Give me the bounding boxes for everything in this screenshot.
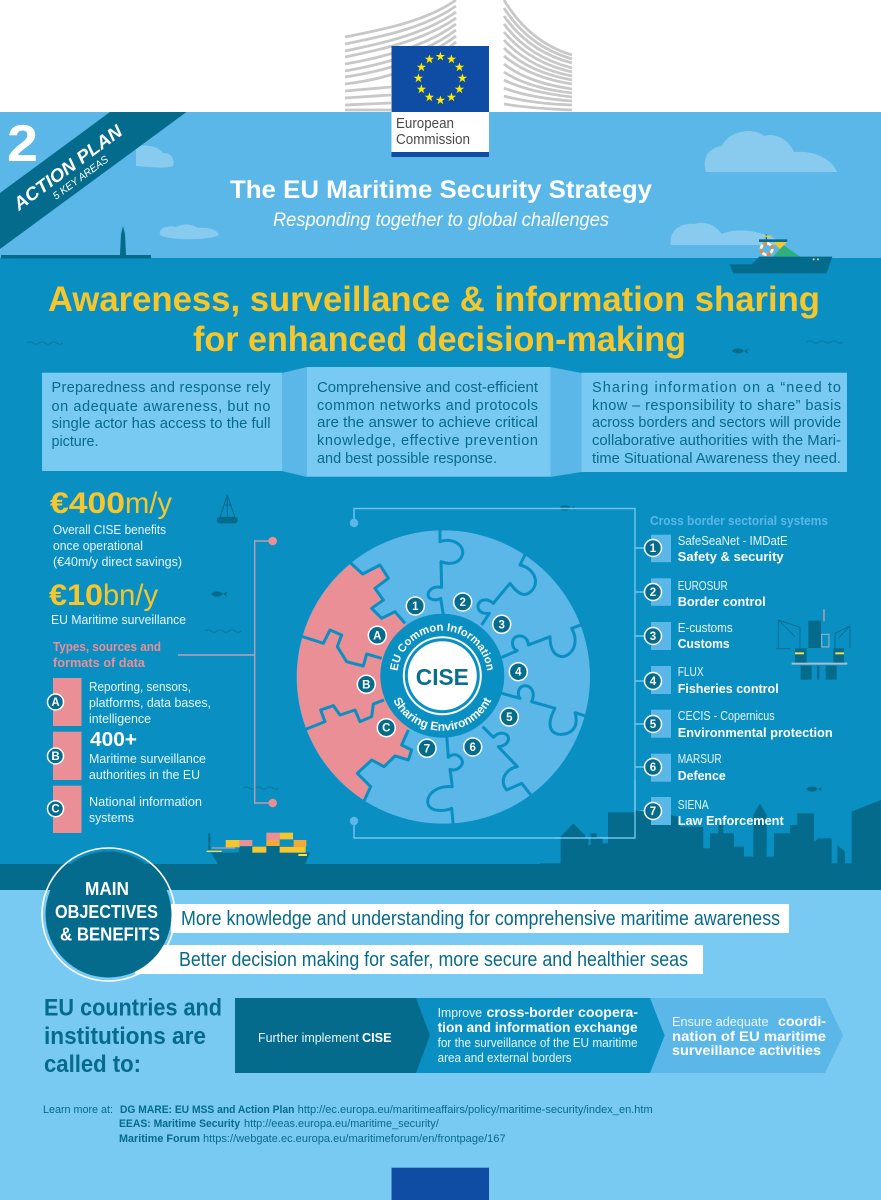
panel: three folded intro boxes: Comprehensive and cost-efficient xyxy=(317,380,538,396)
footer: learn more links: http://ec.europa.eu/maritimeaffairs/policy/maritime-security/index_en.htm xyxy=(298,1104,653,1116)
footer: learn more links: EEAS: Maritime Security xyxy=(119,1118,241,1130)
ribbon: action plan: ACTION PLAN xyxy=(9,120,127,215)
system 4: Fisheries control xyxy=(678,681,779,696)
clouds xyxy=(136,131,837,245)
system 2: EUROSUR xyxy=(678,578,728,593)
system 4: FLUX xyxy=(678,664,704,679)
stat: 400 million per year: (€40m/y direct savings) xyxy=(53,555,182,569)
system 7: SIENA xyxy=(678,797,709,812)
heading: EU countries and institutions xyxy=(44,995,222,1078)
white bar: second objective xyxy=(135,945,703,974)
stat: 400 million per year: m/y xyxy=(125,487,172,520)
panel: three folded intro boxes: know – responsibility to share” basis xyxy=(592,398,841,414)
data type C: National information xyxy=(89,795,202,809)
heading: types, sources and formats of data: formats of data xyxy=(53,656,146,670)
white bar: first objective: More knowledge and understanding for comprehensive maritime awareness xyxy=(181,908,780,930)
wheel number and letter badges: 1 xyxy=(412,601,419,613)
badge: main objectives and benefits: MAIN xyxy=(85,879,129,899)
system 6: 6 xyxy=(650,762,656,774)
system 6: Defence xyxy=(678,768,726,783)
wheel number and letter badges: 3 xyxy=(498,619,505,631)
system 2: Border control xyxy=(678,594,766,609)
stat: 400 million per year xyxy=(50,487,182,569)
arrow step 2 xyxy=(410,998,665,1073)
data type B: authorities in the EU xyxy=(89,768,200,782)
background: sea xyxy=(0,258,881,866)
system 6 xyxy=(644,751,726,783)
badge: main objectives and benefits xyxy=(42,848,175,981)
data type C: systems xyxy=(89,811,134,825)
arrow step 1: CISE xyxy=(362,1030,392,1045)
hub: inner ring: EU Common Information xyxy=(390,623,493,670)
arrow step 3: coordi- xyxy=(778,1013,826,1029)
system 1 xyxy=(644,533,788,564)
background: dark water band xyxy=(0,864,881,890)
data type B: 400+ xyxy=(90,729,137,751)
icon: boat xyxy=(729,234,832,273)
arrow step 3: Ensure adequate xyxy=(672,1014,768,1029)
system 5 xyxy=(644,708,833,740)
footer blue tab xyxy=(392,1168,489,1200)
data type A xyxy=(48,678,211,726)
heading: EU countries and institutions: EU countries and xyxy=(44,995,222,1022)
panel: three folded intro boxes: common networks and protocols xyxy=(317,398,538,414)
panel: three folded intro boxes: Preparedness and response rely xyxy=(52,380,271,396)
heading xyxy=(48,280,820,359)
background: light lower panel xyxy=(0,890,881,1200)
system 4 xyxy=(644,664,779,696)
system 3: Customs xyxy=(678,636,730,651)
arrow step 3: nation of EU maritime xyxy=(672,1028,826,1044)
system 1: SafeSeaNet - IMDatE xyxy=(678,533,788,548)
heading: for enhanced decision-making xyxy=(193,320,686,359)
connector: pink bracket xyxy=(178,537,277,807)
stat: 400 million per year: €400 xyxy=(50,487,125,520)
system 1: 1 xyxy=(650,543,657,555)
icon: lighthouse on jetty xyxy=(1,226,151,258)
hub: inner ring: CISE xyxy=(416,664,469,690)
panel: three folded intro boxes: picture. xyxy=(52,434,98,450)
white bar: first objective xyxy=(171,904,789,933)
badge: main objectives and benefits: OBJECTIVES xyxy=(55,902,158,922)
icon: container ship xyxy=(207,833,310,865)
wheel number and letter badges: 5 xyxy=(506,712,513,724)
wheel number and letter badges: 4 xyxy=(515,667,522,679)
system 5: Environmental protection xyxy=(678,725,833,740)
panel: three folded intro boxes: knowledge, effective prevention xyxy=(317,433,538,449)
system 6: MARSUR xyxy=(678,751,722,766)
system 3 xyxy=(644,620,733,651)
system 1: Safety & security xyxy=(678,549,784,564)
heading: Awareness, surveillance & information sharing xyxy=(48,280,820,319)
wheel number and letter badges: 2 xyxy=(459,597,466,609)
panel: three folded intro boxes: collaborative authorities with the Mari- xyxy=(592,433,841,449)
system 2 xyxy=(644,578,766,609)
footer: learn more links: Maritime Forum xyxy=(119,1133,200,1145)
wheel number and letter badges xyxy=(357,593,527,757)
connector: blue bracket xyxy=(350,508,651,838)
background: white header xyxy=(0,0,881,112)
system 7 xyxy=(644,797,784,828)
panel: three folded intro boxes xyxy=(42,367,847,477)
data type A: intelligence xyxy=(89,712,151,726)
sea decorations xyxy=(27,341,843,792)
system 7: Law Enforcement xyxy=(678,813,784,828)
chart: CISE puzzle wheel xyxy=(296,530,590,824)
panel: three folded intro boxes: Sharing information on a “need to xyxy=(592,380,841,396)
wheel number and letter badges: 7 xyxy=(424,743,430,755)
data type A: Reporting, sensors, xyxy=(89,680,191,694)
data type C: C xyxy=(51,804,60,816)
illustration: Berlaymont building xyxy=(345,0,572,110)
stat: 400 million per year: Overall CISE benefits xyxy=(53,523,166,537)
hub: inner ring xyxy=(380,614,504,738)
heading: types, sources and formats of data: Types, sources and xyxy=(53,640,161,654)
system 3: E-customs xyxy=(678,620,733,635)
stat: 10 billion per year: €10 xyxy=(49,579,103,612)
arrow step 2: area and external borders xyxy=(438,1050,572,1065)
data type C xyxy=(48,786,202,833)
system 2: 2 xyxy=(650,587,656,599)
stat: 10 billion per year xyxy=(49,579,186,627)
data type A: A xyxy=(51,697,60,709)
data type B: B xyxy=(51,751,60,763)
number 2: 2 xyxy=(7,115,38,173)
logo: European Commission wordmark: European xyxy=(396,115,454,132)
panel: three folded intro boxes: are the answer to achieve critical xyxy=(317,415,538,431)
wheel number and letter badges: B xyxy=(362,679,370,691)
footer: learn more links: https://webgate.ec.europa.eu/maritimeforum/en/frontpage/167 xyxy=(203,1133,506,1145)
panel: three folded intro boxes: on adequate awareness, but no xyxy=(52,399,270,415)
redraw of bracket base over skyline xyxy=(554,780,635,838)
arrow step 1 xyxy=(235,998,430,1073)
wheel number and letter badges: C xyxy=(382,723,390,735)
arrow step 2: for the surveillance of the EU maritime xyxy=(438,1035,638,1050)
arrow step 2: cross-border coopera- xyxy=(486,1004,638,1020)
wheel number and letter badges: 6 xyxy=(469,742,476,754)
logo: European Commission wordmark xyxy=(392,112,489,157)
background: sky band xyxy=(0,112,881,258)
logo: European Commission wordmark: Commission xyxy=(396,131,470,148)
system 4: 4 xyxy=(650,676,657,688)
logo: European Commission flag xyxy=(392,46,489,112)
arrow step 3 xyxy=(640,998,843,1073)
panel: three folded intro boxes: single actor has access to the full xyxy=(52,416,270,432)
stat: 10 billion per year: bn/y xyxy=(103,579,158,612)
icon: oil rig xyxy=(776,609,850,680)
panel: three folded intro boxes: across borders and sectors will provide xyxy=(592,415,841,431)
data type A: platforms, data bases, xyxy=(89,696,211,710)
footer: learn more links: http://eeas.europa.eu/maritime_security/ xyxy=(244,1118,440,1130)
subtitle: Responding together to global challenges xyxy=(273,210,609,231)
heading: EU countries and institutions: called to: xyxy=(44,1051,141,1078)
title: The EU Maritime Security Strategy xyxy=(230,176,652,204)
system 7: 7 xyxy=(650,806,656,818)
illustration: city skyline xyxy=(540,800,881,890)
arrow step 3: surveillance activities xyxy=(672,1042,821,1058)
arrow step 2: Improve xyxy=(438,1005,482,1020)
wheel number and letter badges: A xyxy=(373,630,381,642)
footer: learn more links xyxy=(43,1104,653,1145)
data type B: Maritime surveillance xyxy=(89,752,206,766)
data type B xyxy=(48,729,206,782)
system 5: CECIS - Copernicus xyxy=(678,708,775,723)
panel: three folded intro boxes: time Situational Awareness they need. xyxy=(592,451,841,467)
badge: main objectives and benefits: & BENEFITS xyxy=(60,925,160,945)
heading: types, sources and formats of data xyxy=(53,640,161,670)
footer: learn more links: DG MARE: EU MSS and Action Plan xyxy=(120,1104,295,1116)
hub: inner ring: Sharing Environment xyxy=(394,698,492,731)
arrow step 2: tion and information exchange xyxy=(438,1019,638,1035)
stat: 10 billion per year: EU Maritime surveillance xyxy=(51,613,186,627)
stat: 400 million per year: once operational xyxy=(53,539,143,553)
icon: buoy xyxy=(217,495,237,523)
panel: three folded intro boxes: and best possible response. xyxy=(317,451,497,467)
heading: EU countries and institutions: institutions are xyxy=(44,1023,206,1050)
footer: learn more links: Learn more at: xyxy=(43,1104,113,1116)
system 3: 3 xyxy=(650,631,656,643)
heading: cross border sectorial systems: Cross border sectorial systems xyxy=(650,513,828,528)
ribbon: action plan: 5 KEY AREAS xyxy=(51,154,111,202)
arrow step 1: Further implement xyxy=(258,1030,359,1045)
ribbon: action plan xyxy=(0,112,186,249)
system 5: 5 xyxy=(650,719,657,731)
white bar: second objective: Better decision making for safer, more secure and healthier seas xyxy=(179,949,688,971)
